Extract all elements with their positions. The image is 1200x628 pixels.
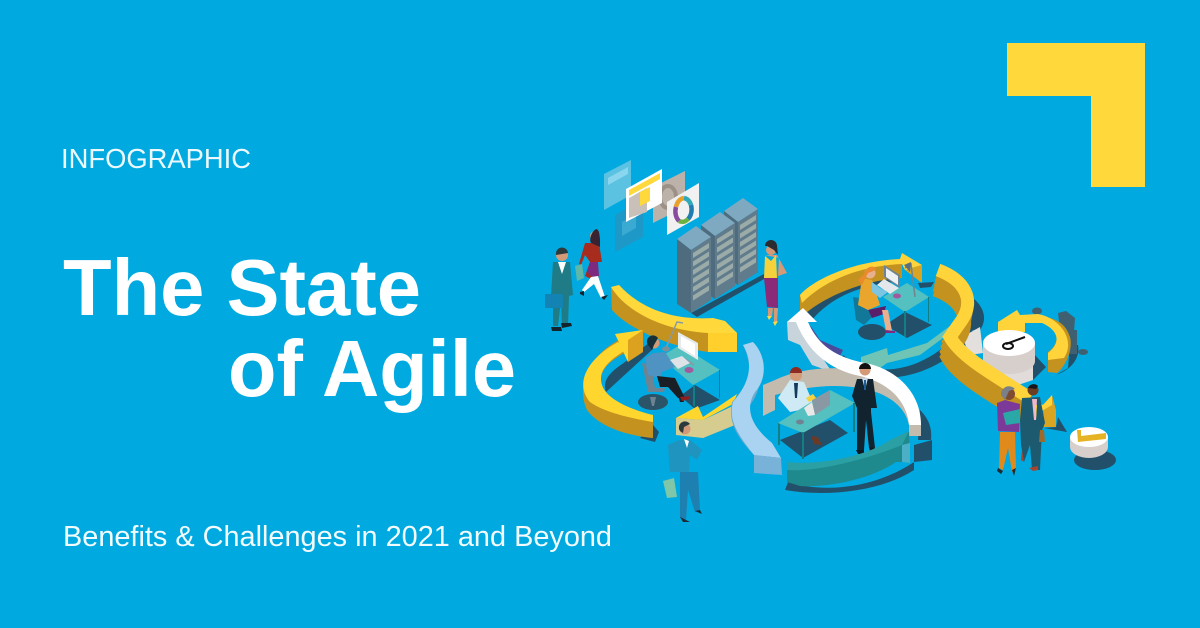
small white cylinder with check icon [1070,427,1116,470]
dark shadows under arrows [605,275,1078,493]
pale yellow arrow [676,394,737,438]
yellow arrow: top left sweep [611,285,737,352]
teal arrow bottom [787,431,910,486]
title: The State [63,243,421,332]
teal arrow under top desk [861,326,951,368]
floating dashboard panels [604,160,699,252]
title [63,243,516,413]
desk: man with headset [638,322,720,410]
light blue S arrow [731,342,782,475]
woman in red walking [575,229,608,300]
man in teal suit on phone [663,421,702,522]
illustration: agile workplace [545,160,1116,522]
couple walking [997,384,1045,476]
man in black suit on phone [852,363,880,454]
desk: woman with laptop [853,262,934,340]
yellow C arrow [998,310,1071,373]
corner mark: yellow bracket [1007,43,1145,187]
white S arrow [763,308,921,436]
desk: man with laptop [778,367,855,459]
icon: key [1003,337,1025,349]
server racks [677,198,764,317]
label: INFOGRAPHIC: INFOGRAPHIC [61,143,251,174]
subtitle: Benefits & Challenges in 2021 and Beyond [63,521,612,553]
clock stack [962,327,1035,387]
title: of Agile [228,324,516,413]
yellow arrow: left loop [583,330,653,438]
man standing left with briefcase [545,247,573,331]
woman in yellow on phone [764,240,787,326]
yellow arrow: top loop [800,253,922,318]
yellow S arrow [935,270,1056,427]
gray machine behind clock [1032,308,1088,355]
